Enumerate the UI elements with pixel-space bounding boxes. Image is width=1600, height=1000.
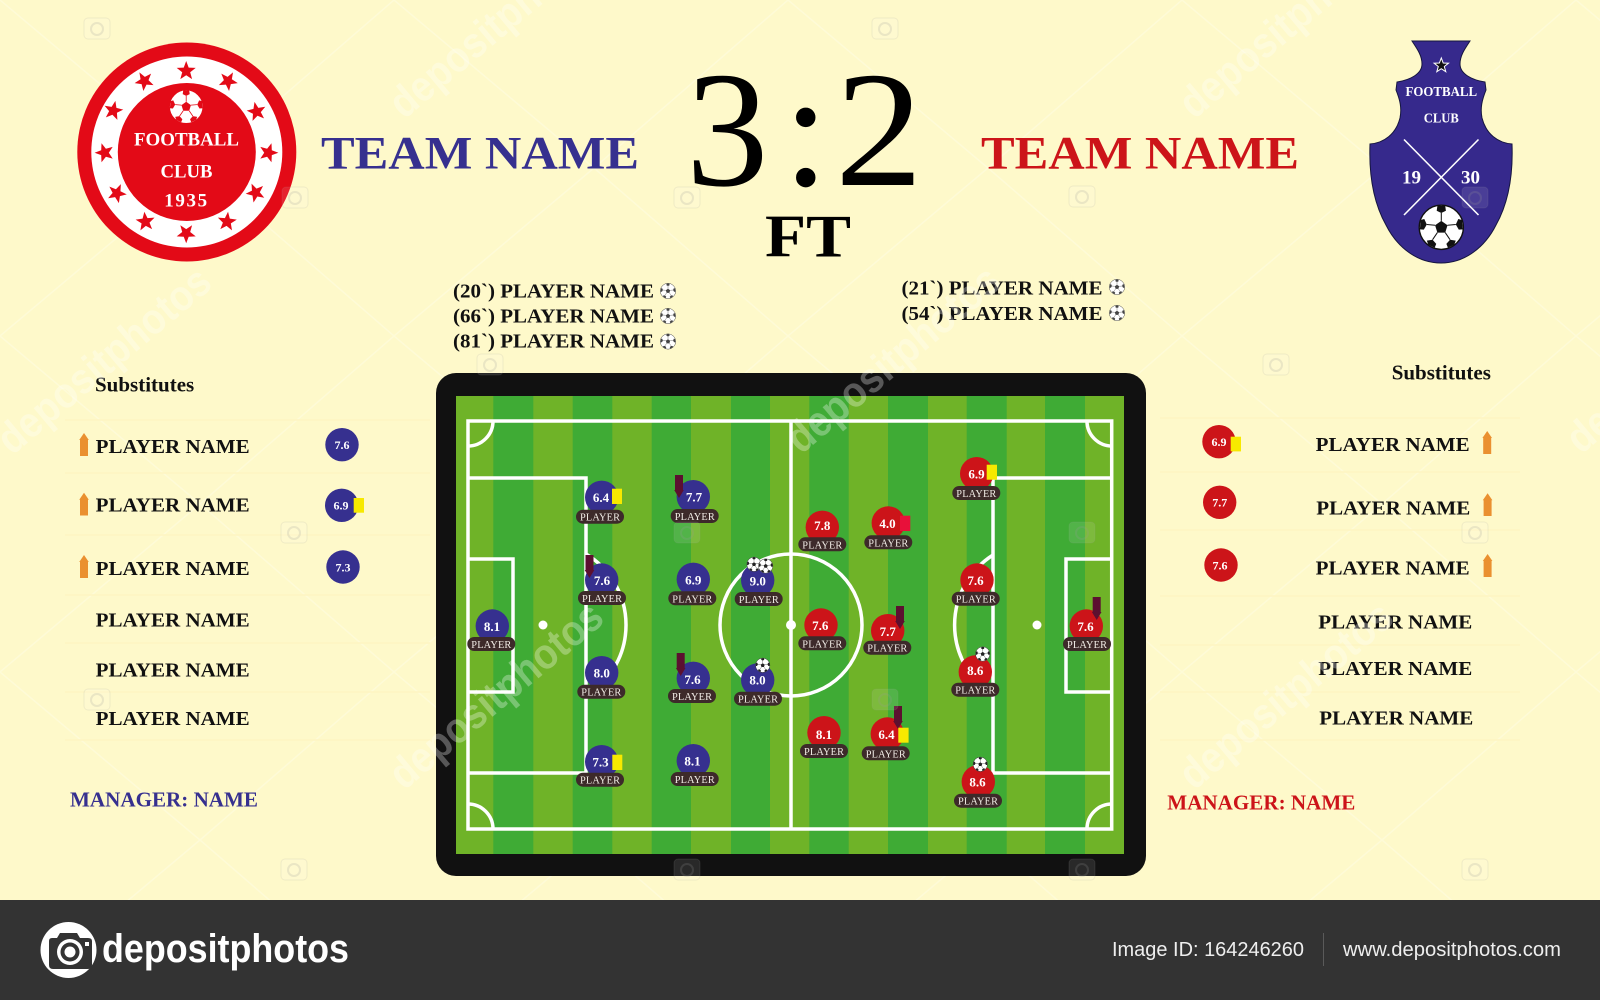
player: 7.7 substituted: 7.7 xyxy=(686,490,703,504)
player: 6.4 with yellow card xyxy=(576,481,624,524)
player: 7.6 substituted: PLAYER xyxy=(582,594,622,605)
away substitute rows xyxy=(1202,425,1492,730)
watermark overlay: depositphotos xyxy=(380,592,613,799)
away club shield badge: FOOTBALL xyxy=(1406,85,1477,100)
player: 7.6 substituted: PLAYER xyxy=(672,692,712,703)
player: 7.6 substituted xyxy=(668,653,716,703)
player: 6.9 with yellow card: 6.9 xyxy=(968,466,985,482)
player: 8.6 with goal: PLAYER xyxy=(958,797,998,808)
away substitute rows: 7.7 xyxy=(1212,496,1227,510)
home substitute rows: PLAYER NAME xyxy=(96,709,250,730)
player: 6.9 with yellow card: PLAYER xyxy=(956,489,996,500)
home substitutes panel xyxy=(65,372,430,740)
home substitute rows: PLAYER NAME xyxy=(96,610,250,632)
home goal scorers: (66`) PLAYER NAME xyxy=(453,306,654,328)
player: 6.9: PLAYER xyxy=(672,594,712,605)
player: 4.0 with red card: PLAYER xyxy=(868,538,908,549)
home substitute rows: PLAYER NAME xyxy=(96,496,250,516)
player: 8.6 with goal: 8.6 xyxy=(969,774,986,790)
player: 6.9 xyxy=(668,563,716,605)
away substitute rows: PLAYER NAME xyxy=(1316,498,1470,520)
player: 7.6: PLAYER xyxy=(802,639,842,650)
player: 8.0 with goal xyxy=(734,658,782,706)
player: 8.6 with goal: PLAYER xyxy=(955,686,995,697)
away club shield badge: 30 xyxy=(1461,168,1480,188)
player: 7.8: 7.8 xyxy=(814,518,831,533)
footer bar xyxy=(0,900,1600,1000)
away substitute rows: 6.9 xyxy=(1212,435,1226,449)
player: 7.6: 7.6 xyxy=(812,618,829,633)
away substitute rows: PLAYER NAME xyxy=(1319,708,1473,730)
player: 7.7 substituted: PLAYER xyxy=(675,512,715,523)
away team players xyxy=(798,457,1111,808)
player: 6.4 substituted with yellow card xyxy=(862,706,910,760)
player: 8.0 xyxy=(577,656,625,699)
score xyxy=(686,38,923,221)
away goal scorers xyxy=(902,278,1125,325)
player: 8.6 with goal xyxy=(951,647,999,697)
footer brand name: depositphotos xyxy=(102,927,349,971)
player: 9.0 with two goals: 9.0 xyxy=(750,574,766,588)
player: 8.0: 8.0 xyxy=(594,666,610,680)
player: goalkeeper 7.6 substituted: 7.6 xyxy=(1077,619,1094,634)
home substitute rows: 7.3 xyxy=(336,560,350,574)
home substitute rows: 6.9 xyxy=(334,498,348,512)
home goal scorers xyxy=(453,282,676,352)
player: goalkeeper 7.6 substituted xyxy=(1063,597,1111,651)
football pitch xyxy=(456,396,1124,854)
home substitutes heading: Substitutes xyxy=(95,372,194,396)
player: 6.9: 6.9 xyxy=(685,572,702,588)
player: 7.6 xyxy=(798,608,846,650)
away goal scorers: (21`) PLAYER NAME xyxy=(902,278,1102,300)
player: 6.9 with yellow card xyxy=(952,457,1000,500)
player: 7.3 with yellow card xyxy=(576,745,624,787)
player: 8.6 with goal xyxy=(954,757,1002,808)
score: 2 xyxy=(835,38,923,221)
away team name: TEAM NAME xyxy=(981,128,1299,180)
player: 7.8: PLAYER xyxy=(802,540,842,551)
away substitutes panel xyxy=(1160,360,1520,740)
home substitute rows xyxy=(79,428,364,730)
player: 7.6: 7.6 xyxy=(967,573,984,588)
player: 8.1: 8.1 xyxy=(816,727,832,742)
score: 3 xyxy=(686,38,768,221)
home team players xyxy=(467,475,783,787)
home substitute rows: PLAYER NAME xyxy=(96,559,250,580)
player: 9.0 with two goals xyxy=(735,557,783,606)
player: 7.6: PLAYER xyxy=(956,595,996,606)
home team name: TEAM NAME xyxy=(321,128,639,180)
player: 8.1: PLAYER xyxy=(804,747,844,758)
home club badge: CLUB xyxy=(160,162,213,182)
player: 8.6 with goal: 8.6 xyxy=(967,663,984,678)
score: : xyxy=(783,38,829,221)
player: 7.3 with yellow card: PLAYER xyxy=(580,776,620,787)
away substitutes heading: Substitutes xyxy=(1392,360,1491,384)
player: 8.1 xyxy=(800,716,848,758)
player: 6.4 with yellow card: 6.4 xyxy=(593,490,610,505)
player: goalkeeper 8.1: PLAYER xyxy=(471,640,511,651)
away manager: MANAGER: NAME xyxy=(1167,790,1355,814)
tablet frame xyxy=(436,373,1146,876)
away club shield badge: 19 xyxy=(1402,168,1421,188)
player: 9.0 with two goals: PLAYER xyxy=(739,595,779,606)
icon: depositphotos camera logo xyxy=(40,922,96,978)
away substitute rows: PLAYER NAME xyxy=(1316,558,1470,580)
player: 8.1: 8.1 xyxy=(684,754,701,768)
player: goalkeeper 8.1: 8.1 xyxy=(484,619,500,634)
player: 8.1: PLAYER xyxy=(675,775,715,786)
player: 6.4 with yellow card: PLAYER xyxy=(580,513,620,524)
player: 8.1 xyxy=(671,744,719,786)
away substitute rows: 7.6 xyxy=(1212,558,1228,572)
player: 7.6 substituted: 7.6 xyxy=(594,573,611,588)
player: 7.3 with yellow card: 7.3 xyxy=(592,754,609,770)
home club badge: 1935 xyxy=(164,190,209,212)
image id: Image ID: 164246260 xyxy=(1112,939,1304,961)
home manager: MANAGER: NAME xyxy=(70,788,258,812)
player: 8.0 with goal: PLAYER xyxy=(738,695,778,706)
away substitute rows: PLAYER NAME xyxy=(1318,659,1472,680)
player: goalkeeper 8.1 xyxy=(467,609,515,651)
player: 7.8 xyxy=(798,511,846,551)
player: goalkeeper 7.6 substituted: PLAYER xyxy=(1067,640,1107,651)
home club badge: FOOTBALL xyxy=(134,130,239,150)
player: 7.6 substituted: 7.6 xyxy=(684,672,701,687)
home substitute rows: 7.6 xyxy=(334,438,350,452)
full time label: FT xyxy=(765,204,851,270)
player: 7.7 substituted xyxy=(671,475,719,523)
home goal scorers: (81`) PLAYER NAME xyxy=(453,332,654,352)
away club shield badge: CLUB xyxy=(1424,112,1459,126)
player: 7.6 substituted xyxy=(578,555,626,605)
player: 8.0 with goal: 8.0 xyxy=(749,672,766,688)
watermark overlay: depositphotos xyxy=(1170,592,1403,799)
player: 7.7 substituted xyxy=(863,606,911,655)
player: 4.0 with red card: 4.0 xyxy=(879,516,896,531)
watermark overlay: depositphotos xyxy=(777,256,1010,463)
home goal scorers: (20`) PLAYER NAME xyxy=(453,282,654,302)
player: 6.4 substituted with yellow card: 6.4 xyxy=(878,727,895,742)
website url: www.depositphotos.com xyxy=(1342,939,1561,961)
player: 7.7 substituted: PLAYER xyxy=(867,644,907,655)
away substitute rows: PLAYER NAME xyxy=(1316,435,1470,456)
home substitute rows: PLAYER NAME xyxy=(96,437,250,458)
away substitute rows: PLAYER NAME xyxy=(1318,612,1472,634)
away goal scorers: (54`) PLAYER NAME xyxy=(902,304,1102,325)
away club shield badge xyxy=(1370,41,1512,263)
player: 4.0 with red card xyxy=(864,506,912,549)
home club badge xyxy=(77,42,296,262)
home substitute rows: PLAYER NAME xyxy=(96,660,250,682)
player: 7.7 substituted: 7.7 xyxy=(880,624,896,639)
player: 6.4 substituted with yellow card: PLAYER xyxy=(866,749,906,760)
player: 7.6 xyxy=(952,563,1000,606)
player: 8.0: PLAYER xyxy=(581,688,621,699)
